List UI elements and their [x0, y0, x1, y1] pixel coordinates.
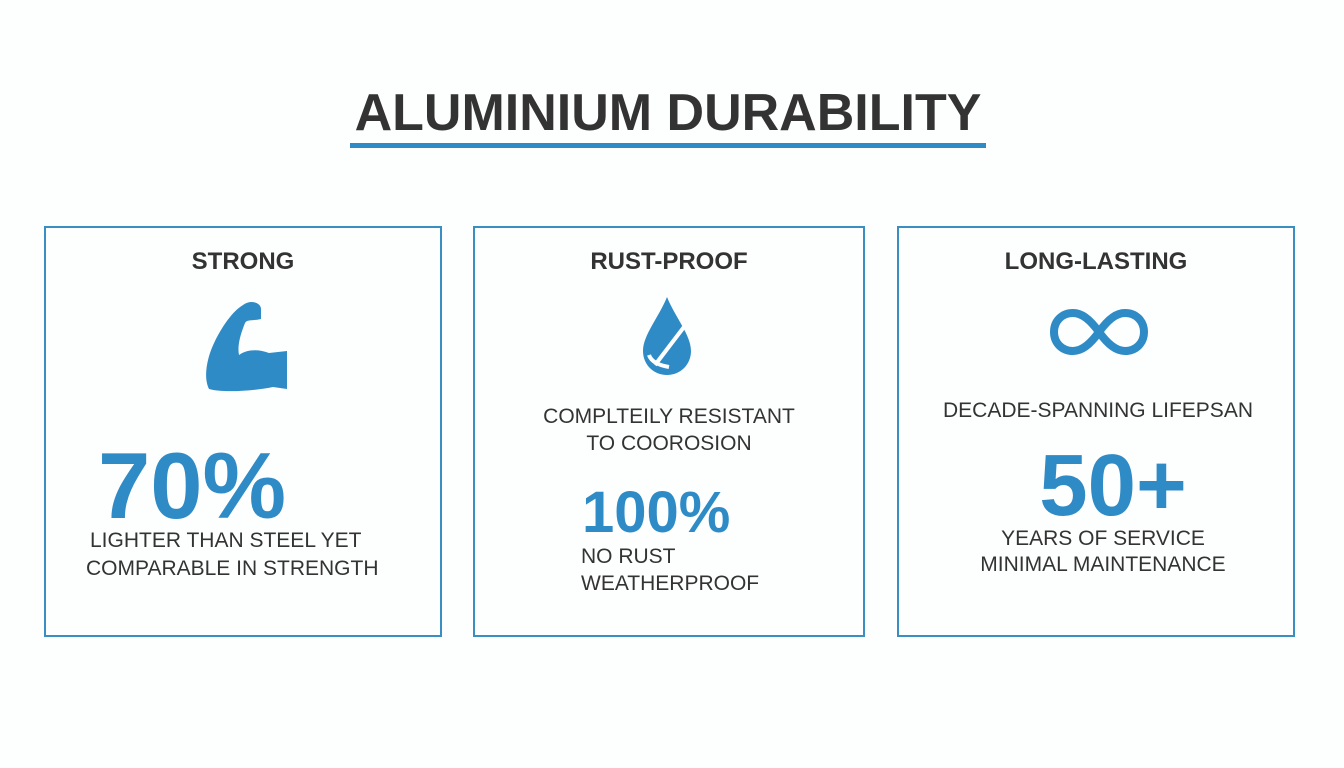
stat: 50+: 50+	[1039, 437, 1187, 534]
text: years of service	[980, 527, 1226, 576]
panel: strong	[44, 226, 442, 637]
heading: strong: STRONG	[192, 248, 294, 275]
text: lighter than steel	[86, 529, 378, 580]
text: resistant: TO COOROSION	[586, 432, 752, 455]
icon: infinity	[1050, 309, 1148, 355]
text: lighter than steel: COMPARABLE IN STRENGTH	[86, 557, 378, 580]
icon: water drop	[643, 297, 691, 375]
icon: flexed arm	[206, 302, 287, 392]
text: no rust: NO RUST	[581, 545, 676, 568]
heading: long-lasting: LONG-LASTING	[1005, 248, 1187, 275]
text: no rust: WEATHERPROOF	[581, 572, 759, 595]
panel: rust-proof	[473, 226, 865, 637]
heading: rust-proof: RUST-PROOF	[590, 248, 748, 275]
stat: 70%: 70%	[98, 433, 286, 538]
title underline	[350, 143, 986, 148]
text: years of service: MINIMAL MAINTENANCE	[980, 553, 1226, 576]
panel: long-lasting	[897, 226, 1295, 637]
text: no rust	[581, 545, 759, 595]
text: lifespan: DECADE-SPANNING LIFEPSAN	[943, 399, 1253, 422]
stat: 100%: 100%	[582, 480, 730, 545]
text: years of service: YEARS OF SERVICE	[1001, 527, 1205, 550]
text: resistant: COMPLTEILY RESISTANT	[543, 405, 795, 428]
title: ALUMINIUM DURABILITY	[355, 84, 981, 142]
text: resistant	[543, 405, 795, 455]
text: lighter than steel: LIGHTER THAN STEEL YET	[90, 529, 362, 552]
